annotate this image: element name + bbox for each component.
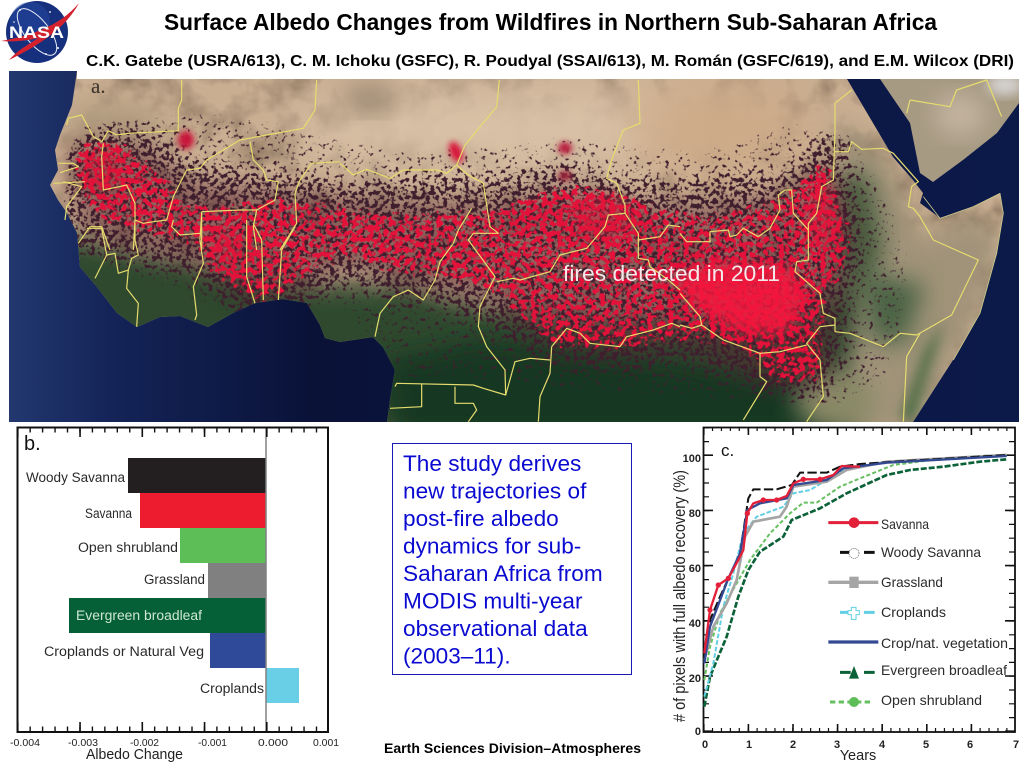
- x axis tick labels: 0.001: [313, 737, 339, 749]
- y axis tick labels: 80: [689, 508, 701, 520]
- x axis title: Albedo Change: [86, 746, 183, 763]
- bar labels: Evergreen broadleaf: [76, 608, 202, 623]
- country borders: central: [340, 80, 680, 422]
- y axis tick labels: [683, 453, 701, 738]
- legend labels: Croplands: [881, 604, 946, 620]
- bar labels: Croplands: [200, 681, 264, 696]
- land base and vegetation: [50, 71, 1003, 422]
- text box: study summary: post-fire albedo: [403, 506, 559, 531]
- icon: NASA logo: NASA: [9, 24, 64, 42]
- ocean: [9, 71, 1019, 422]
- bar labels: Open shrubland: [78, 540, 178, 555]
- x axis tick labels: -0.004: [10, 737, 40, 749]
- legend key: Evergreen broadleaf: [840, 666, 877, 679]
- fire scatter: red pixels: [70, 135, 855, 385]
- text box: study summary: dynamics for sub-: [403, 534, 581, 558]
- x axis tick labels: 1: [746, 739, 752, 751]
- text box: study summary: new trajectories of: [403, 478, 587, 504]
- legend labels: Woody Savanna: [881, 544, 981, 560]
- text box: study summary: Saharan Africa from: [403, 561, 603, 586]
- authors line: C.K. Gatebe (USRA/613), C. M. Ichoku (GSFC), R. Poudyal (SSAI/613), M. Román (GSFC/619), and E.M. Wilcox (DRI): [86, 53, 1014, 70]
- panel a: fire map of northern sub-Saharan Africa: [9, 71, 1023, 440]
- Arabian peninsula: [880, 79, 1019, 182]
- axis frame and ticks: [17, 428, 328, 732]
- panel letter b: b.: [24, 433, 41, 455]
- legend key: Croplands: [840, 607, 877, 619]
- legend labels: Grassland: [881, 574, 943, 590]
- bar labels: Woody Savanna: [26, 470, 125, 485]
- y axis tick labels: 60: [689, 563, 701, 575]
- x axis tick labels: [702, 739, 1019, 751]
- panel c: albedo recovery line chart: [671, 428, 1019, 764]
- x axis tick labels: 0: [702, 739, 708, 751]
- bar labels: Grassland: [144, 572, 205, 587]
- fire underlay: smoky band tint: [65, 140, 855, 385]
- x axis tick labels: 4: [879, 739, 886, 751]
- x axis tick labels: -0.001: [198, 737, 227, 749]
- x axis tick labels: 0.000: [258, 737, 288, 749]
- y axis tick labels: 40: [689, 618, 701, 630]
- x axis tick labels: [10, 737, 339, 749]
- x axis tick labels: 2: [790, 739, 796, 751]
- x axis tick labels: -0.002: [130, 737, 159, 749]
- country borders: guinea coast: [87, 213, 295, 327]
- legend key: Crop/nat. vegetation: [828, 637, 878, 647]
- x axis tick labels: -0.003: [68, 737, 98, 749]
- text box: study summary: The study derives: [403, 451, 581, 476]
- legend: [828, 517, 878, 707]
- map label: fires detected in 2011: fires detected in 2011: [563, 261, 780, 286]
- bar labels: Croplands or Natural Veg: [44, 644, 204, 659]
- text box: study summary: (2003–11).: [403, 644, 511, 668]
- legend labels: Crop/nat. vegetation: [881, 635, 1008, 651]
- panel b: albedo change bar chart: [10, 428, 339, 763]
- legend key: Open shrubland: [830, 697, 873, 707]
- title: Surface Albedo Changes from Wildfires in Northern Sub-Saharan Africa: [164, 9, 937, 35]
- x axis tick labels: 6: [967, 739, 973, 751]
- y axis tick labels: 0: [695, 726, 701, 738]
- icon: NASA logo: [1, 1, 79, 63]
- x axis tick labels: 5: [923, 739, 929, 751]
- fire scatter: dark burn pixels: [60, 105, 915, 415]
- legend labels: Open shrubland: [881, 692, 982, 708]
- legend labels: Savanna: [881, 516, 929, 532]
- y axis tick labels: 20: [689, 673, 701, 685]
- bars: [69, 458, 299, 703]
- x axis tick labels: 7: [1013, 739, 1019, 751]
- x axis title: Years: [840, 748, 876, 764]
- legend key: Savanna: [828, 517, 878, 528]
- text box: study summary: MODIS multi-year: [403, 588, 583, 614]
- panel letter c: c.: [721, 441, 734, 460]
- y axis tick labels: 100: [683, 453, 701, 465]
- footer: division name: Earth Sciences Division–Atmospheres: [384, 740, 641, 756]
- recovery curves: [704, 455, 1007, 707]
- y axis title: # of pixels with full albedo recovery (%): [671, 470, 689, 722]
- text box: study summary: observational data: [403, 616, 588, 641]
- map label: panel letter a: a.: [91, 74, 106, 98]
- bar labels: [26, 470, 264, 696]
- legend labels: [881, 516, 1008, 708]
- fire core: densest burning: [85, 131, 840, 332]
- axis frame and ticks: [703, 428, 1015, 732]
- legend labels: Evergreen broadleaf: [881, 662, 1007, 678]
- legend key: Woody Savanna: [840, 548, 877, 558]
- bar labels: Savanna: [85, 506, 132, 521]
- country borders: west: [53, 80, 340, 250]
- text box: study summary: [392, 444, 632, 674]
- zero line: [265, 428, 267, 731]
- country borders: east: [680, 80, 1003, 422]
- x axis tick labels: 3: [834, 739, 840, 751]
- legend key: Grassland: [828, 577, 878, 588]
